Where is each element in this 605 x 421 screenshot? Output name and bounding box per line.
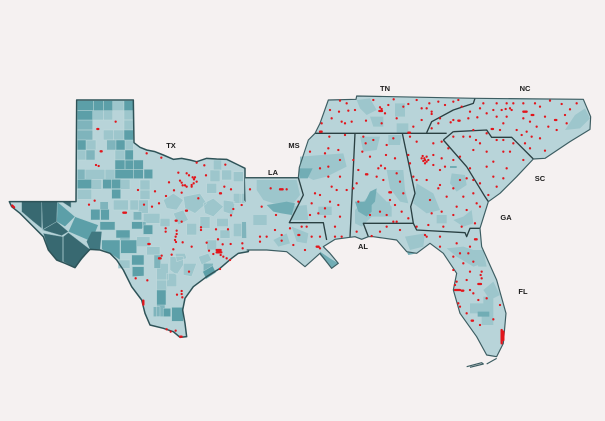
state label: SC: SC — [535, 174, 546, 183]
state label: FL: FL — [518, 287, 528, 296]
Texas county shading, strong tier — [57, 101, 216, 321]
Texas — [9, 100, 254, 337]
Presidio area county — [87, 232, 102, 249]
Georgia, Tennessee and Carolinas shaded patches — [357, 98, 590, 325]
far west Texas dark counties — [22, 202, 90, 268]
eastern land — [245, 96, 591, 357]
Texas city dots — [12, 122, 249, 337]
eastern state boundaries — [245, 98, 533, 240]
state label: TN: TN — [380, 84, 390, 93]
state label: AL: AL — [358, 242, 368, 251]
eastern city dots — [250, 99, 577, 343]
eastern coast outline — [245, 96, 591, 367]
Texas county shading, light tier — [77, 101, 245, 293]
Louisiana, Mississippi and Alabama shaded patches — [253, 135, 483, 267]
state label: MS: MS — [288, 141, 300, 150]
Texas outline — [9, 100, 254, 337]
Texas land — [9, 100, 254, 337]
state label: LA: LA — [268, 168, 279, 177]
state label: TX: TX — [166, 141, 176, 150]
state label: GA: GA — [500, 213, 512, 222]
state label: NC: NC — [520, 84, 531, 93]
Texas county shading, mid tier — [77, 120, 247, 317]
eastern stronger patches — [267, 166, 489, 317]
eastern states — [245, 96, 591, 367]
